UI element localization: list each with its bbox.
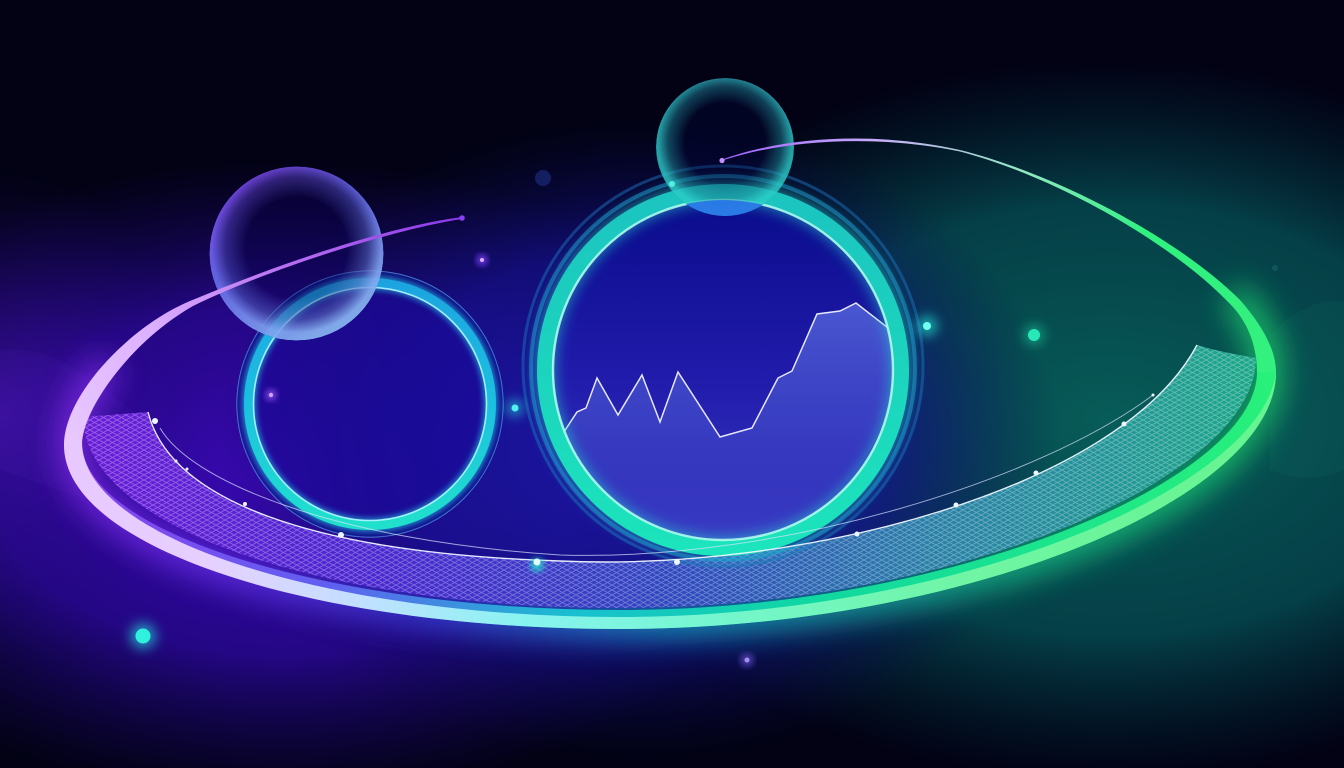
top arc endpoint (719, 158, 725, 163)
left arc (64, 217, 462, 445)
glowing dots (130, 170, 1278, 667)
big ring with chart (523, 166, 923, 566)
small ring (237, 271, 503, 537)
timeline curve with nodes (148, 345, 1197, 572)
mesh band (83, 345, 1256, 608)
left arc endpoint (459, 215, 465, 221)
top arc (721, 139, 1276, 372)
orbit ring glow (73, 295, 1267, 622)
orbit ring (64, 372, 1276, 629)
purple bubble (210, 166, 384, 340)
area chart (560, 303, 893, 540)
teal bubble (656, 78, 794, 216)
